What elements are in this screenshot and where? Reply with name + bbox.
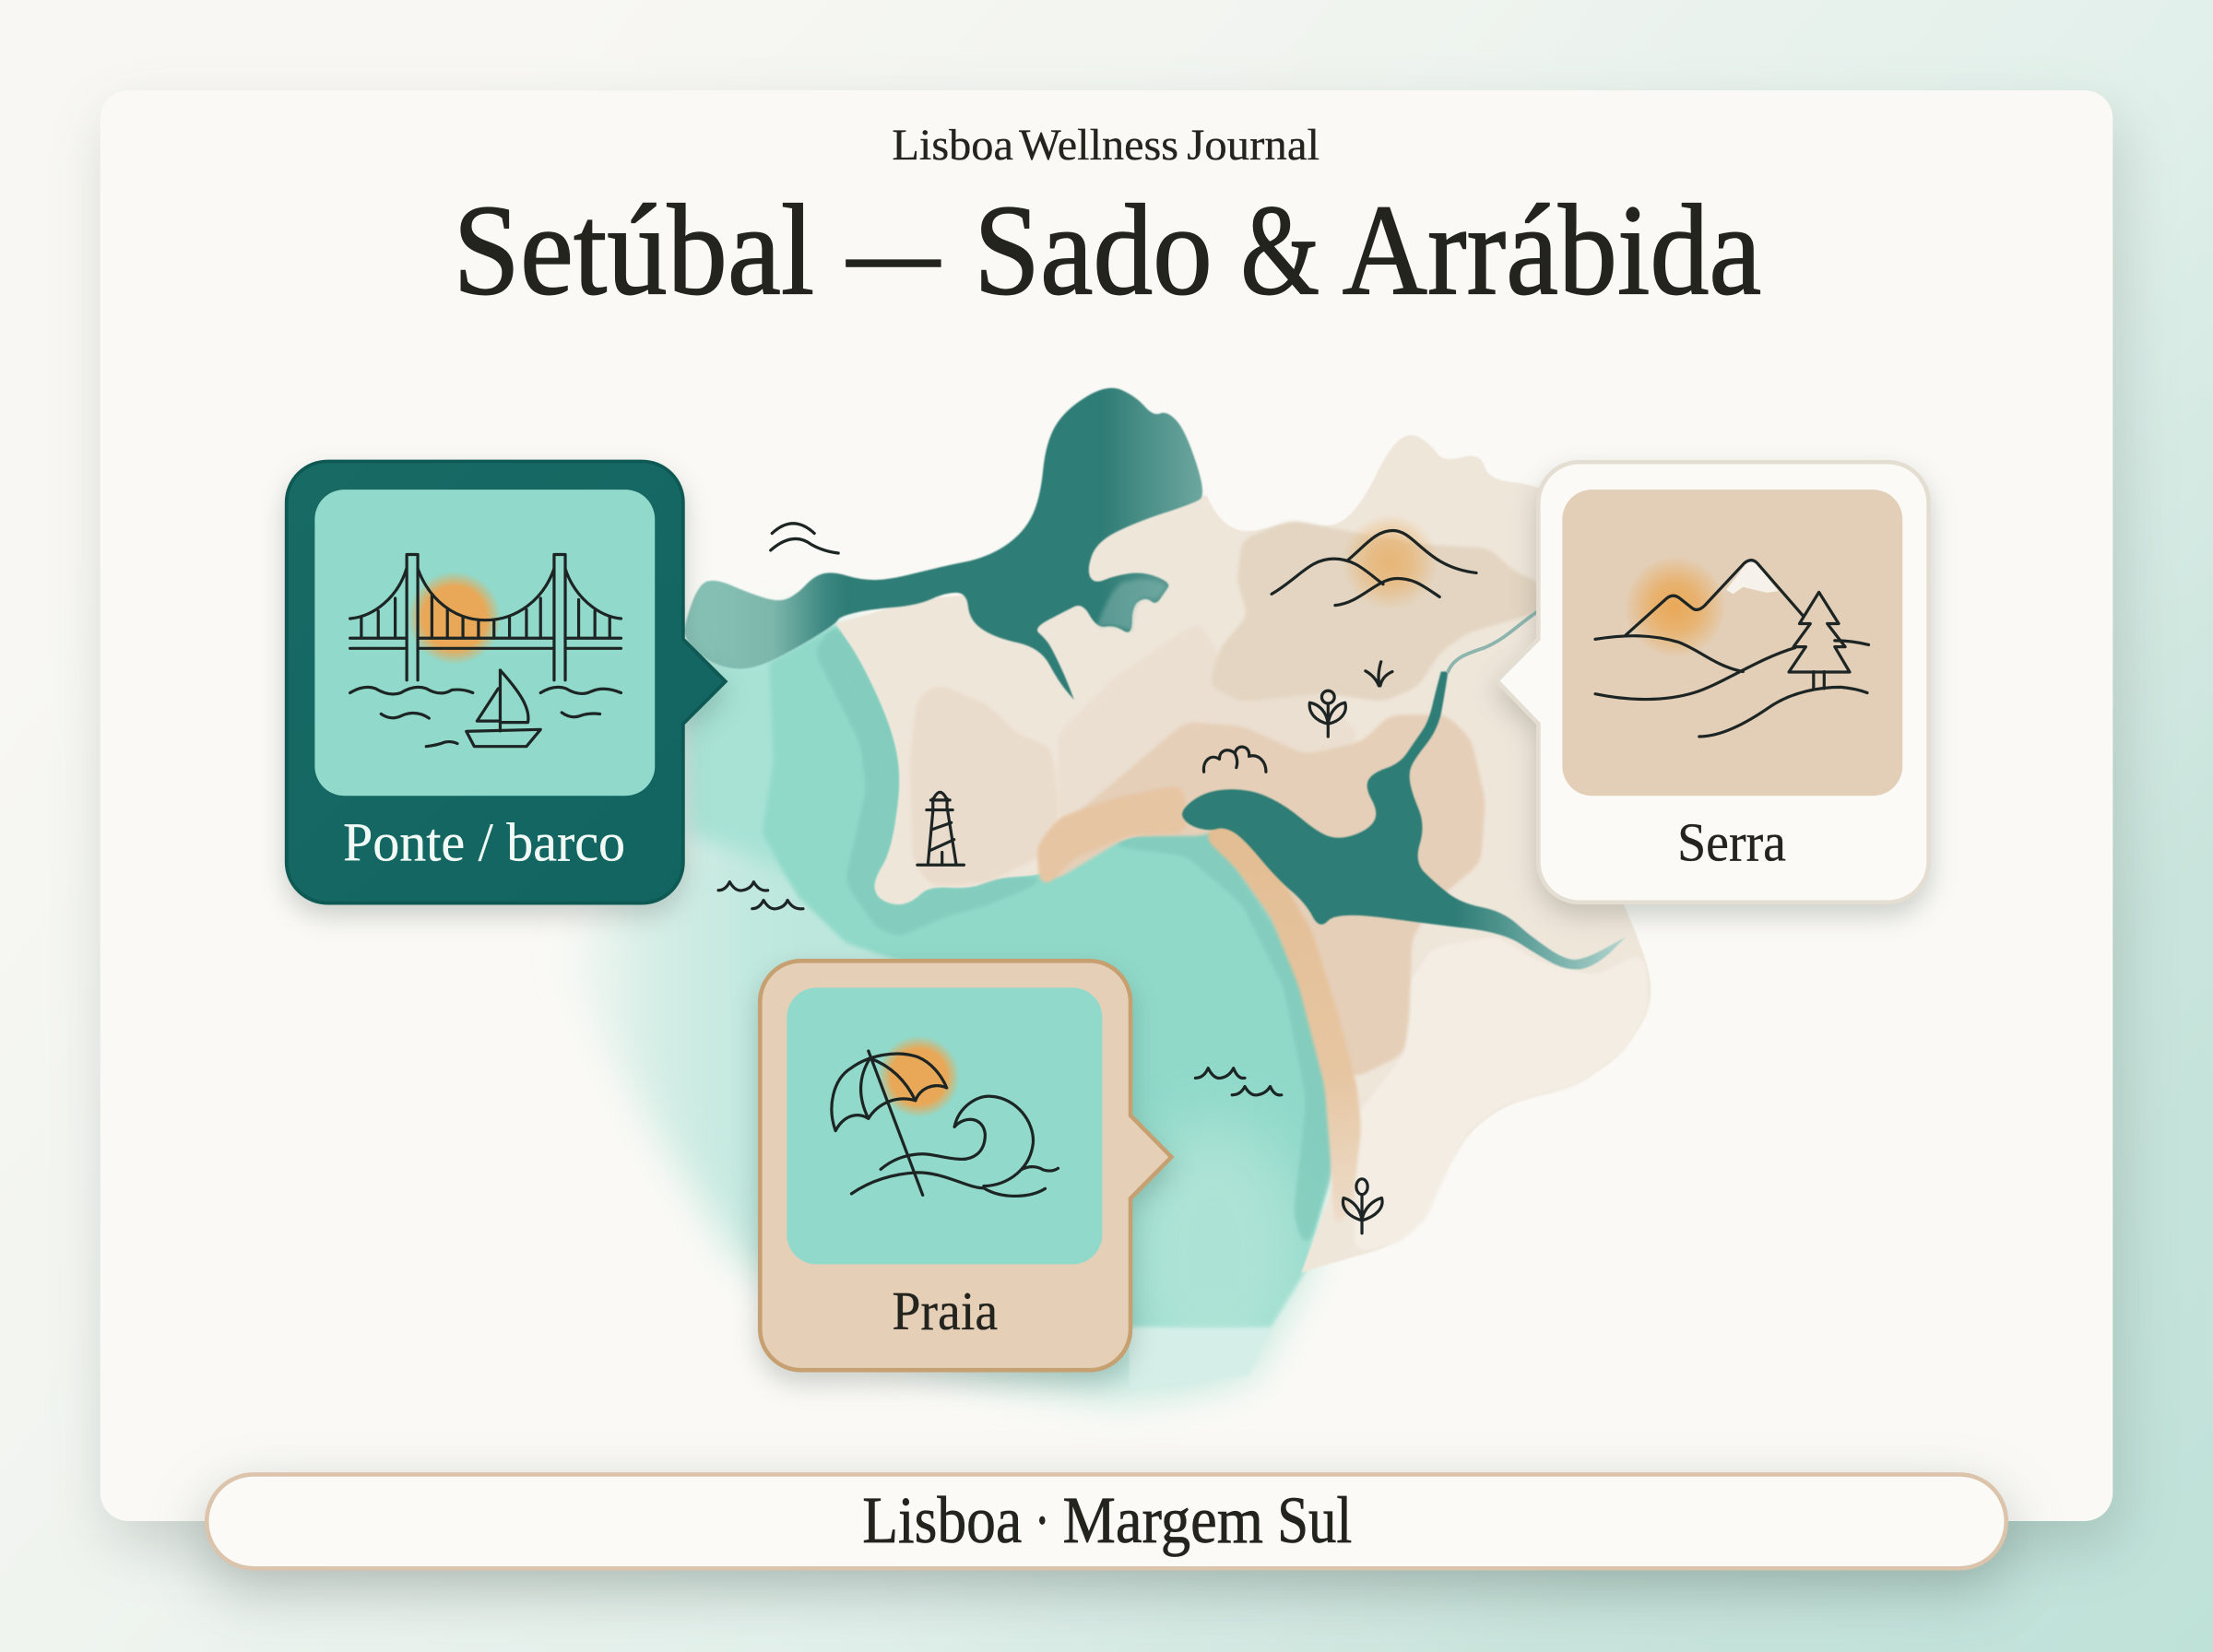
icon: hills with sun: [1272, 513, 1476, 609]
callout: Ponte / barco: [287, 461, 726, 903]
icon: waves right: [1195, 1068, 1282, 1095]
watercolor map: [564, 388, 1651, 1397]
icon panel: sand: [1562, 490, 1902, 796]
sea: mint water body: [564, 624, 1341, 1397]
callout body: [287, 461, 726, 903]
icon: small plant: [1309, 690, 1345, 737]
label: Praia: Praia: [892, 1280, 998, 1341]
icon panel: mint: [787, 987, 1102, 1264]
icon: lighthouse: [917, 792, 964, 865]
land tones: layered patches: [910, 521, 1649, 1253]
river Sado: dark teal estuary: [1182, 611, 1626, 970]
main card panel: [101, 90, 2112, 1521]
icon: mountains and pine tree: [1595, 556, 1869, 737]
icon: grass: [1366, 662, 1392, 686]
label: Serra: Serra: [1677, 812, 1786, 873]
icon: waves left: [718, 882, 803, 909]
title: —: [846, 179, 941, 322]
footer label: ·: [1035, 1483, 1050, 1557]
callout body: [1497, 462, 1929, 903]
callout body: [760, 961, 1171, 1370]
pill shape: [207, 1474, 2006, 1568]
subtitle: Lisboa Wellness Journal: Wellness: [1019, 122, 1178, 170]
land: Setúbal peninsula base: [835, 435, 1651, 1273]
footer label: Sul: [1277, 1483, 1352, 1557]
subtitle: Lisboa Wellness Journal: Journal: [1187, 122, 1320, 170]
title: Arrábida: [1343, 179, 1761, 322]
title: [453, 179, 1761, 322]
icon: small plant south: [1343, 1179, 1382, 1233]
footer pill: [207, 1474, 2006, 1568]
title: Sado: [974, 179, 1213, 322]
icon: beach umbrella and wave: [832, 1035, 1059, 1196]
icon: tree cloud: [1203, 747, 1266, 772]
footer label: [862, 1483, 1352, 1557]
callout: Serra: [1497, 462, 1929, 903]
footer label: Margem: [1063, 1483, 1263, 1557]
icon: bridge and sailboat: [350, 555, 621, 747]
subtitle: Lisboa Wellness Journal: Lisboa: [892, 122, 1013, 170]
icon panel: mint: [314, 490, 655, 796]
title: Setúbal: [453, 179, 814, 322]
river Tejo: dark teal estuary: [684, 388, 1202, 700]
label: Ponte / barco: Ponte / barco: [343, 812, 625, 873]
icon: birds: [771, 524, 838, 553]
footer label: Lisboa: [862, 1483, 1022, 1557]
title: &: [1240, 179, 1320, 322]
subtitle: Lisboa Wellness Journal: [892, 122, 1320, 170]
callout: Praia: [760, 961, 1171, 1370]
